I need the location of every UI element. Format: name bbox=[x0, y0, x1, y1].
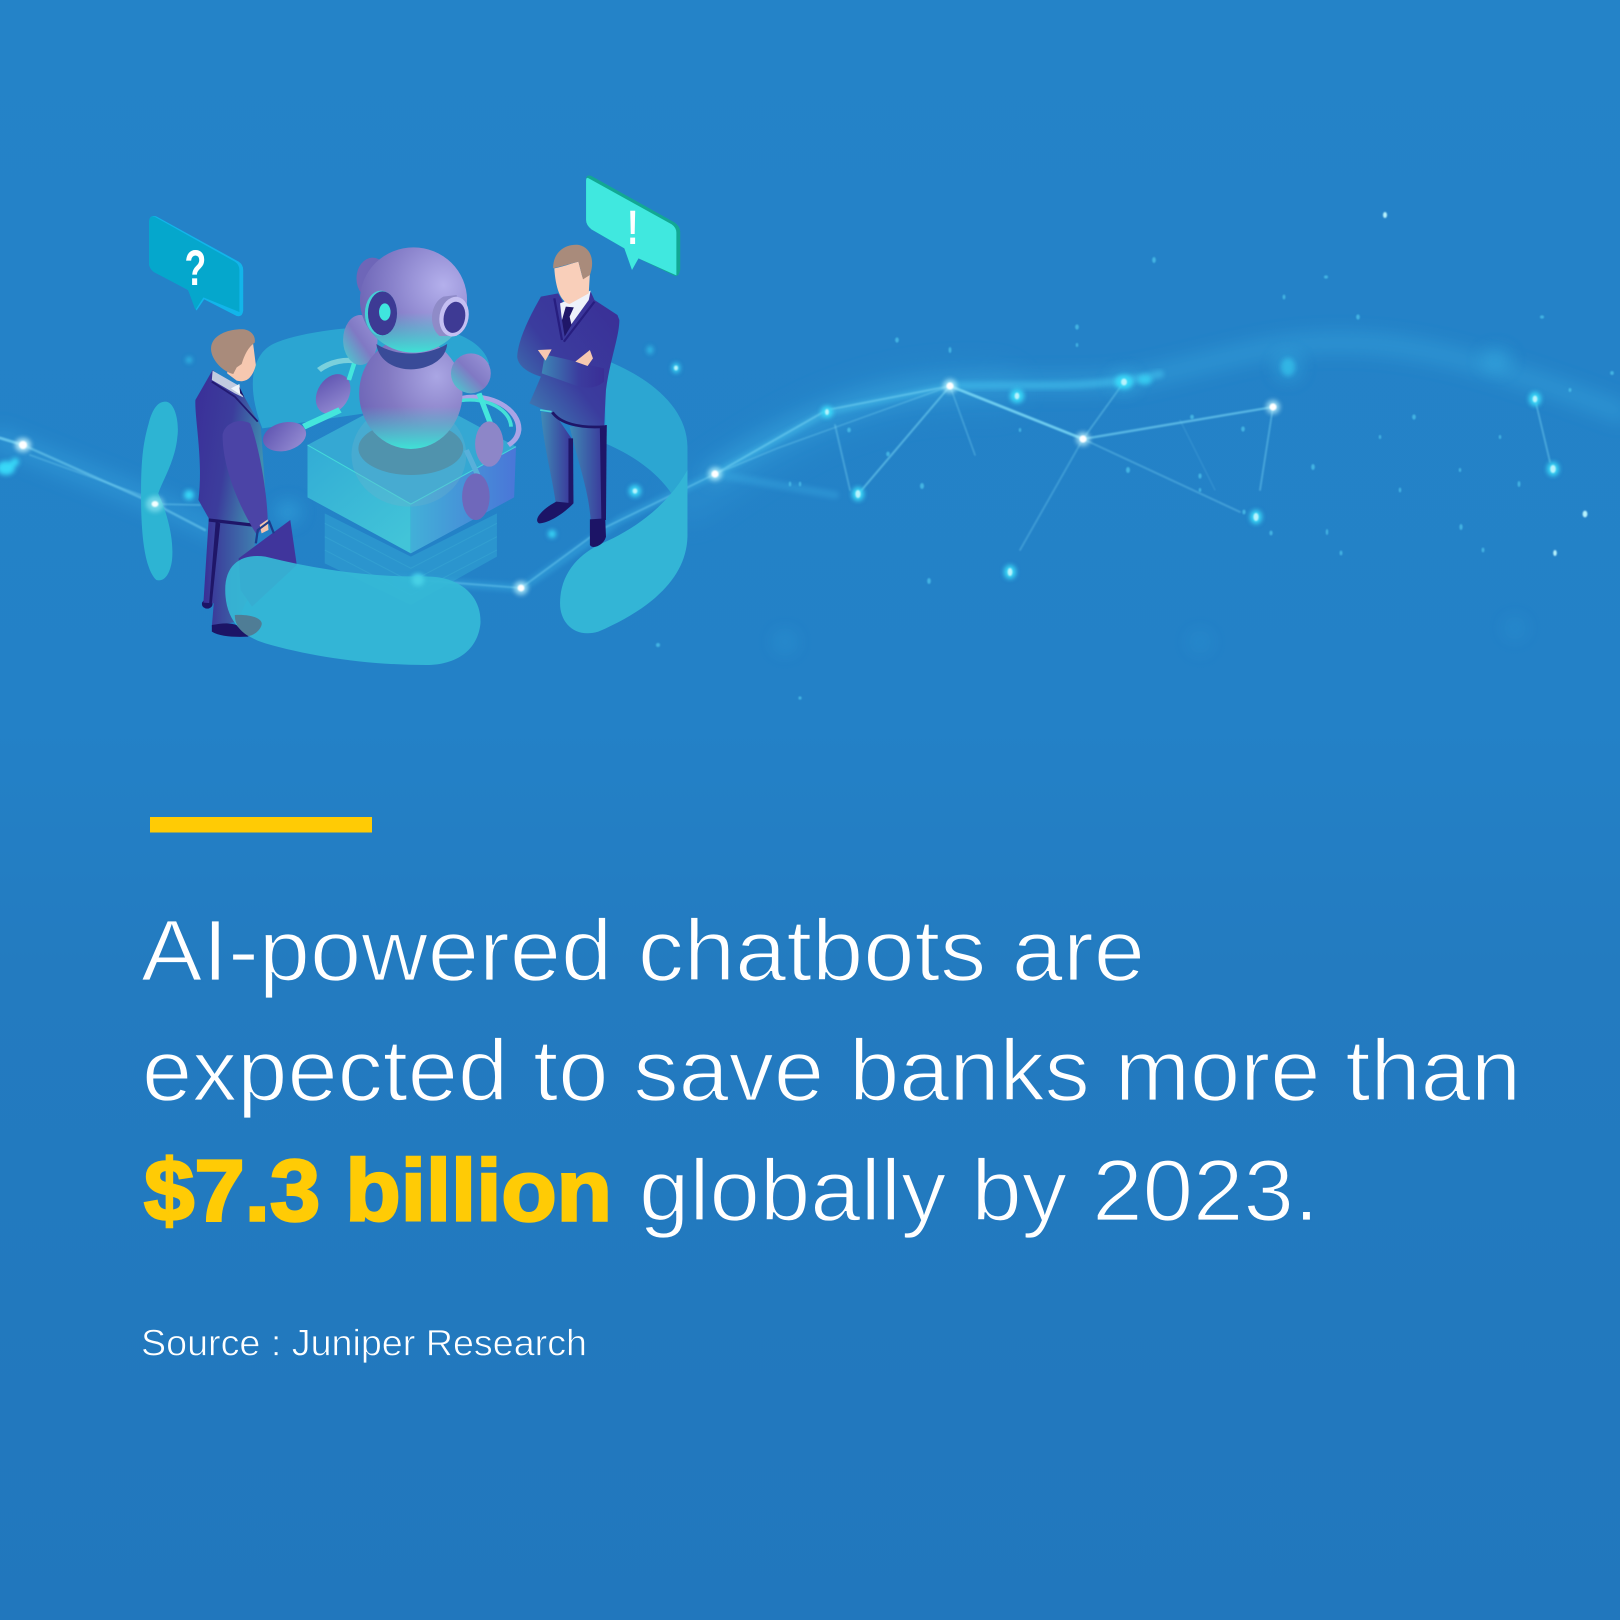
man left shoe shadow bbox=[235, 615, 262, 636]
yellow accent bar bbox=[150, 817, 372, 832]
man left far shoe bbox=[202, 599, 213, 609]
man right far leg bbox=[570, 425, 607, 520]
man right jacket bbox=[517, 292, 619, 427]
rest of line 3: globally by 2023. bbox=[639, 1143, 1319, 1240]
man left briefcase bbox=[239, 520, 297, 607]
node highlights over illustration bbox=[15, 379, 1280, 595]
man left face and neck bbox=[227, 344, 256, 381]
swoosh: right back arc bbox=[605, 360, 687, 494]
speech bubble: question: ? bbox=[185, 241, 206, 297]
cyan node halos bbox=[0, 346, 1559, 586]
man left collar bbox=[212, 371, 243, 397]
small star particles bbox=[656, 257, 1614, 700]
man right hair bbox=[553, 245, 592, 279]
upper cube left face bbox=[307, 445, 411, 553]
robot back arm ring right bbox=[461, 397, 519, 445]
man left shoe bbox=[212, 623, 248, 637]
robot back bump bbox=[356, 258, 389, 299]
man right shoes bbox=[537, 502, 573, 523]
robot right hand upper bbox=[475, 421, 503, 467]
source note: Source : Juniper Research bbox=[141, 1323, 587, 1364]
glow band across the network bbox=[0, 343, 1620, 588]
robot far-side hand left bbox=[309, 370, 357, 418]
man left trousers bbox=[203, 518, 256, 627]
man right shirt and tie bbox=[560, 291, 591, 327]
robot head bbox=[360, 247, 467, 353]
man right lapels bbox=[554, 298, 594, 342]
illustration: robot and two businessmen bbox=[141, 175, 687, 665]
swoosh: front right bbox=[560, 470, 687, 633]
robot left eye bbox=[365, 291, 397, 336]
robot right hand lower bbox=[462, 473, 490, 520]
upper cube right face bbox=[411, 447, 516, 553]
swoosh: back arc bbox=[253, 326, 489, 428]
network constellation background bbox=[0, 212, 1620, 700]
soft large halos bbox=[276, 350, 1527, 654]
headline line 3 bbox=[144, 1143, 1319, 1240]
man left hair bbox=[211, 329, 255, 374]
robot arm to front hand bbox=[304, 410, 340, 427]
robot body bbox=[359, 338, 462, 449]
speech bubble: exclamation bbox=[586, 175, 680, 276]
swoosh: left sliver bbox=[141, 402, 178, 580]
man right face bbox=[554, 262, 590, 304]
swoosh: front bottom (overlaps man and case) bbox=[225, 556, 480, 665]
robot shoulder left bbox=[343, 315, 378, 365]
robot right eye lens bbox=[432, 295, 472, 338]
man left arm bbox=[223, 421, 268, 535]
highlighted figure: $7.3 billion bbox=[144, 1143, 612, 1240]
headline line 1: AI-powered chatbots are bbox=[141, 902, 1145, 1000]
upper cube top face bbox=[307, 390, 516, 504]
robot front hand bbox=[258, 417, 311, 456]
man right bbox=[517, 245, 619, 547]
robot right arm segments bbox=[479, 393, 490, 423]
lower stack layers bbox=[325, 513, 497, 605]
man right crossed arm bbox=[542, 355, 604, 388]
robot neck collar bbox=[376, 344, 447, 369]
robot back arm ring left bbox=[319, 360, 359, 370]
man left bbox=[195, 329, 297, 637]
ghost of robot in cube bbox=[352, 403, 466, 507]
man left jacket bbox=[195, 370, 267, 526]
man right near leg bbox=[541, 412, 573, 507]
headline line 2: expected to save banks more than bbox=[142, 1023, 1521, 1120]
cyan node cores bbox=[633, 212, 1587, 576]
connecting lines bbox=[0, 382, 1550, 588]
robot right shoulder bbox=[451, 353, 491, 393]
robot bbox=[258, 247, 519, 520]
robot shadow bbox=[358, 422, 463, 475]
man left hand bbox=[260, 519, 268, 533]
headline bbox=[141, 902, 1521, 1240]
speech bubble: question bbox=[149, 216, 243, 316]
server stack under the robot bbox=[307, 390, 516, 605]
man right hands bbox=[538, 349, 552, 361]
speech bubble: exclamation: ! bbox=[627, 200, 638, 254]
